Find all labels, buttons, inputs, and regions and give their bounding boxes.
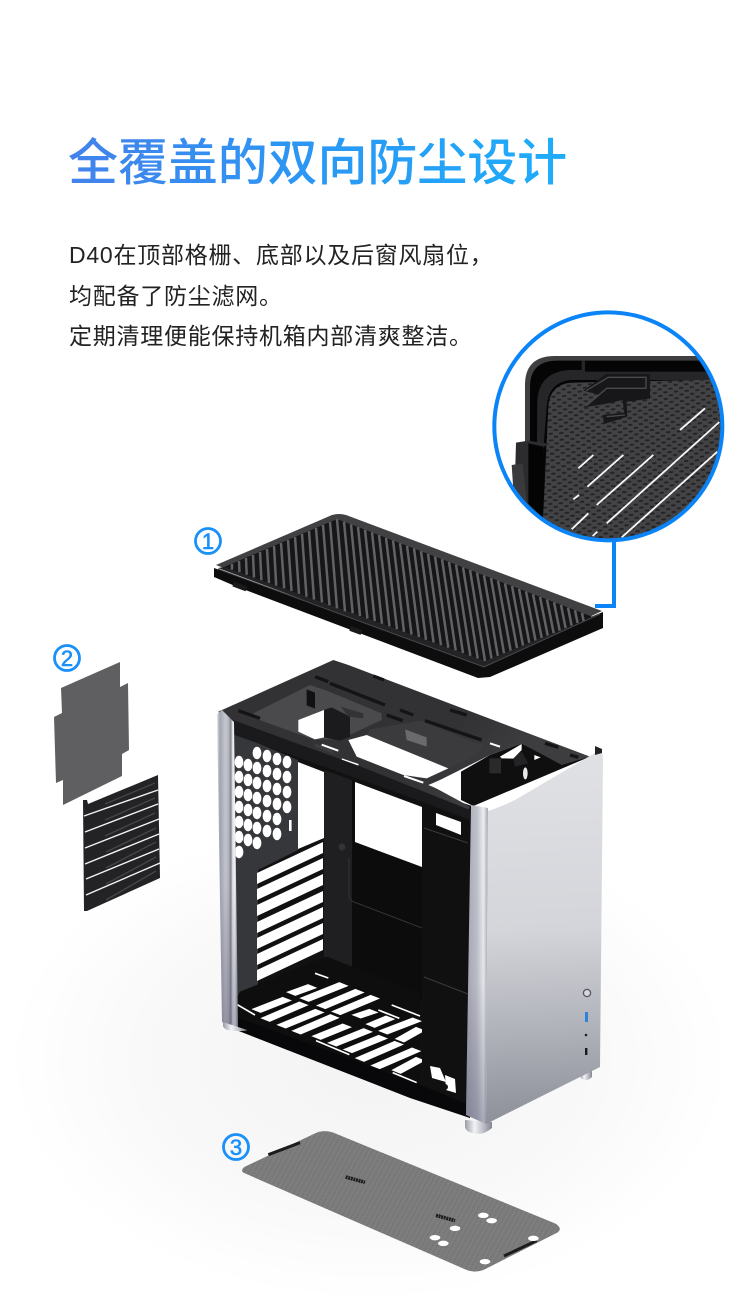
pc case xyxy=(217,660,603,1134)
number badge 2: 2 xyxy=(61,646,73,671)
left foot xyxy=(223,1022,247,1031)
case interior back xyxy=(226,725,472,1118)
rear opening in top plate xyxy=(248,685,382,739)
central pillar and motherboard tray xyxy=(324,770,422,1000)
number badge 2 xyxy=(54,646,80,671)
number badge 1: 1 xyxy=(202,529,214,554)
center foot xyxy=(465,1120,492,1134)
rear fan dust filter sheet xyxy=(54,662,129,805)
description text xyxy=(69,242,493,349)
front io ports xyxy=(583,989,591,1055)
side tabs xyxy=(515,441,551,517)
number badge 3 xyxy=(224,1134,248,1160)
expansion slot covers xyxy=(83,775,160,911)
callout connector line xyxy=(595,538,614,606)
rear panel with fan holes xyxy=(234,733,324,1006)
rear tab xyxy=(595,746,602,755)
side panel xyxy=(486,750,603,1124)
mesh surface xyxy=(542,379,727,547)
title: 全覆盖的双向防尘设计 xyxy=(68,135,567,191)
left front column xyxy=(217,710,238,1028)
front opening in top plate xyxy=(367,721,483,768)
number badge 1 xyxy=(196,528,220,554)
case floor with vent slots xyxy=(228,957,425,1090)
front lower lip xyxy=(226,1014,470,1118)
right front column xyxy=(466,805,488,1124)
expansion slot openings xyxy=(257,842,323,981)
bottom dust filter mesh xyxy=(242,1131,560,1272)
infographic canvas xyxy=(53,137,724,1272)
description text: 均配备了防尘滤网。 xyxy=(69,283,283,309)
right internal drive panel xyxy=(422,805,470,1110)
description text: D40在顶部格栅、底部以及后窗风扇位， xyxy=(69,242,493,268)
front beam xyxy=(228,718,470,820)
tray ribs xyxy=(232,519,584,661)
description text: 定期清理便能保持机箱内部清爽整洁。 xyxy=(69,323,473,349)
top frame plate xyxy=(218,660,590,820)
filter frame corner xyxy=(525,356,700,503)
retention clip xyxy=(583,374,650,424)
mesh highlights xyxy=(572,408,719,537)
right foot xyxy=(580,1068,592,1080)
top dust filter tray xyxy=(214,514,603,678)
callout magnified lens xyxy=(494,312,727,547)
number badge 3: 3 xyxy=(230,1135,242,1160)
